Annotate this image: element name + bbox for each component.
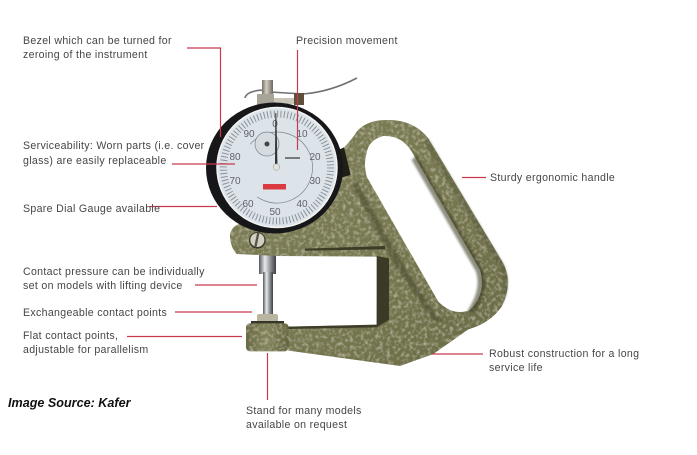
dial numbers: 30 — [309, 176, 321, 187]
label: sturdy handle: Sturdy ergonomic handle — [490, 172, 615, 184]
image source credit: Image Source: Kafer — [8, 396, 132, 410]
bezel — [206, 102, 343, 234]
dial numbers: 10 — [296, 129, 308, 140]
label: robust construction: Robust construction for a long — [489, 348, 639, 360]
lug screw — [249, 232, 266, 249]
foot — [246, 323, 289, 351]
dial gauge — [206, 102, 343, 234]
sub dial — [255, 132, 279, 156]
label: stand: Stand for many models — [246, 405, 362, 417]
arrows mark — [285, 157, 300, 159]
red maker label — [263, 184, 286, 190]
dial numbers: 80 — [229, 152, 241, 163]
label: precision movement: Precision movement — [296, 35, 398, 47]
dial face — [217, 108, 337, 228]
label: contact pressure: Contact pressure can be individually — [23, 266, 205, 278]
dial numbers: 20 — [309, 152, 321, 163]
spindle — [251, 254, 284, 325]
inner arc — [231, 122, 323, 213]
label: stand: available on request — [246, 419, 347, 431]
instrument: thickness gauge — [206, 78, 508, 366]
label: contact pressure: set on models with lifting device — [23, 280, 183, 292]
label: flat contact points: Flat contact points, — [23, 330, 118, 342]
label: robust construction: service life — [489, 362, 543, 374]
tick ring — [224, 114, 330, 221]
dial numbers — [229, 119, 321, 218]
handle shading — [412, 155, 485, 313]
dial numbers: 0 — [272, 119, 278, 130]
dial numbers: 70 — [229, 176, 241, 187]
needle — [275, 113, 278, 166]
label: spare dial gauge: Spare Dial Gauge available — [23, 203, 160, 215]
top lever and posts — [245, 78, 357, 105]
label: serviceability: Serviceability: Worn parts (i.e. cover — [23, 140, 205, 152]
gauge back — [337, 147, 351, 179]
label: flat contact points: adjustable for parallelism — [23, 344, 148, 356]
dial numbers: 40 — [296, 199, 308, 210]
frame and handle — [230, 120, 508, 366]
leader lines — [127, 48, 486, 400]
dial numbers: 60 — [242, 199, 254, 210]
label: exchangeable contact points: Exchangeable contact points — [23, 307, 167, 319]
dial numbers: 90 — [243, 129, 255, 140]
label: bezel: Bezel which can be turned for — [23, 35, 172, 47]
label: bezel: zeroing of the instrument — [23, 49, 148, 61]
label: serviceability: glass) are easily replaceable — [23, 155, 167, 167]
dial numbers: 50 — [269, 207, 281, 218]
window shadow — [377, 256, 389, 325]
